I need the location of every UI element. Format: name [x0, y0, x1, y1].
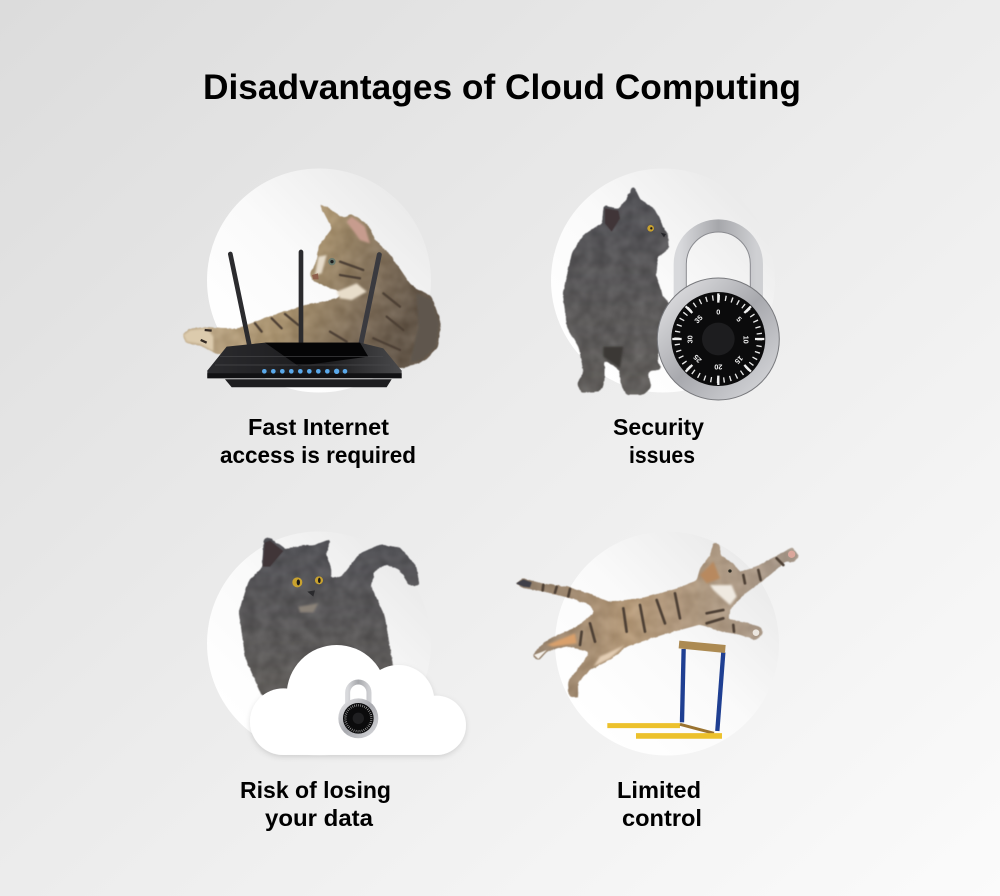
panel: fast internet — [182, 168, 441, 468]
label: security issues: issues — [629, 442, 695, 468]
label: fast internet: access is required — [220, 442, 416, 468]
label: fast internet — [220, 414, 416, 468]
panel: risk of losing data — [207, 532, 466, 831]
router — [207, 252, 402, 387]
tabby cat — [182, 202, 441, 368]
panel: security issues — [551, 168, 779, 468]
disc: security — [551, 168, 775, 392]
padlock: 0 — [716, 307, 720, 316]
cat with router — [182, 202, 441, 387]
grey cat — [563, 185, 670, 395]
cat jumping over hurdle — [515, 542, 799, 736]
jumping cat — [515, 542, 799, 698]
disc: limited control — [555, 532, 779, 756]
padlock: 35 — [692, 313, 705, 325]
label: risk — [240, 777, 391, 831]
padlock: 10 — [741, 336, 750, 344]
title: Disadvantages of Cloud Computing — [203, 68, 801, 107]
label: security issues: Security — [613, 414, 704, 440]
cloud — [250, 645, 466, 755]
label: limited control: Limited — [617, 777, 701, 803]
padlock: 20 — [714, 362, 722, 371]
label: limited control: control — [622, 805, 702, 831]
label: security issues — [613, 414, 704, 468]
label: limited control — [617, 777, 702, 831]
cat with cloud — [239, 538, 466, 755]
cat with padlock — [563, 185, 779, 400]
padlock: 5 — [734, 315, 744, 324]
padlock: 30 — [685, 335, 694, 343]
label: risk: your data — [265, 805, 373, 831]
grey cat standing — [239, 538, 420, 698]
padlock: 25 — [691, 353, 704, 365]
padlock: 15 — [733, 354, 745, 366]
disc: risk — [207, 532, 431, 756]
padlock — [657, 226, 779, 400]
label: fast internet: Fast Internet — [248, 414, 389, 440]
label: risk: Risk of losing — [240, 777, 391, 803]
panel: limited control — [515, 532, 799, 831]
hurdle — [607, 641, 726, 736]
disc: fast internet — [207, 168, 431, 392]
small padlock — [338, 682, 378, 738]
